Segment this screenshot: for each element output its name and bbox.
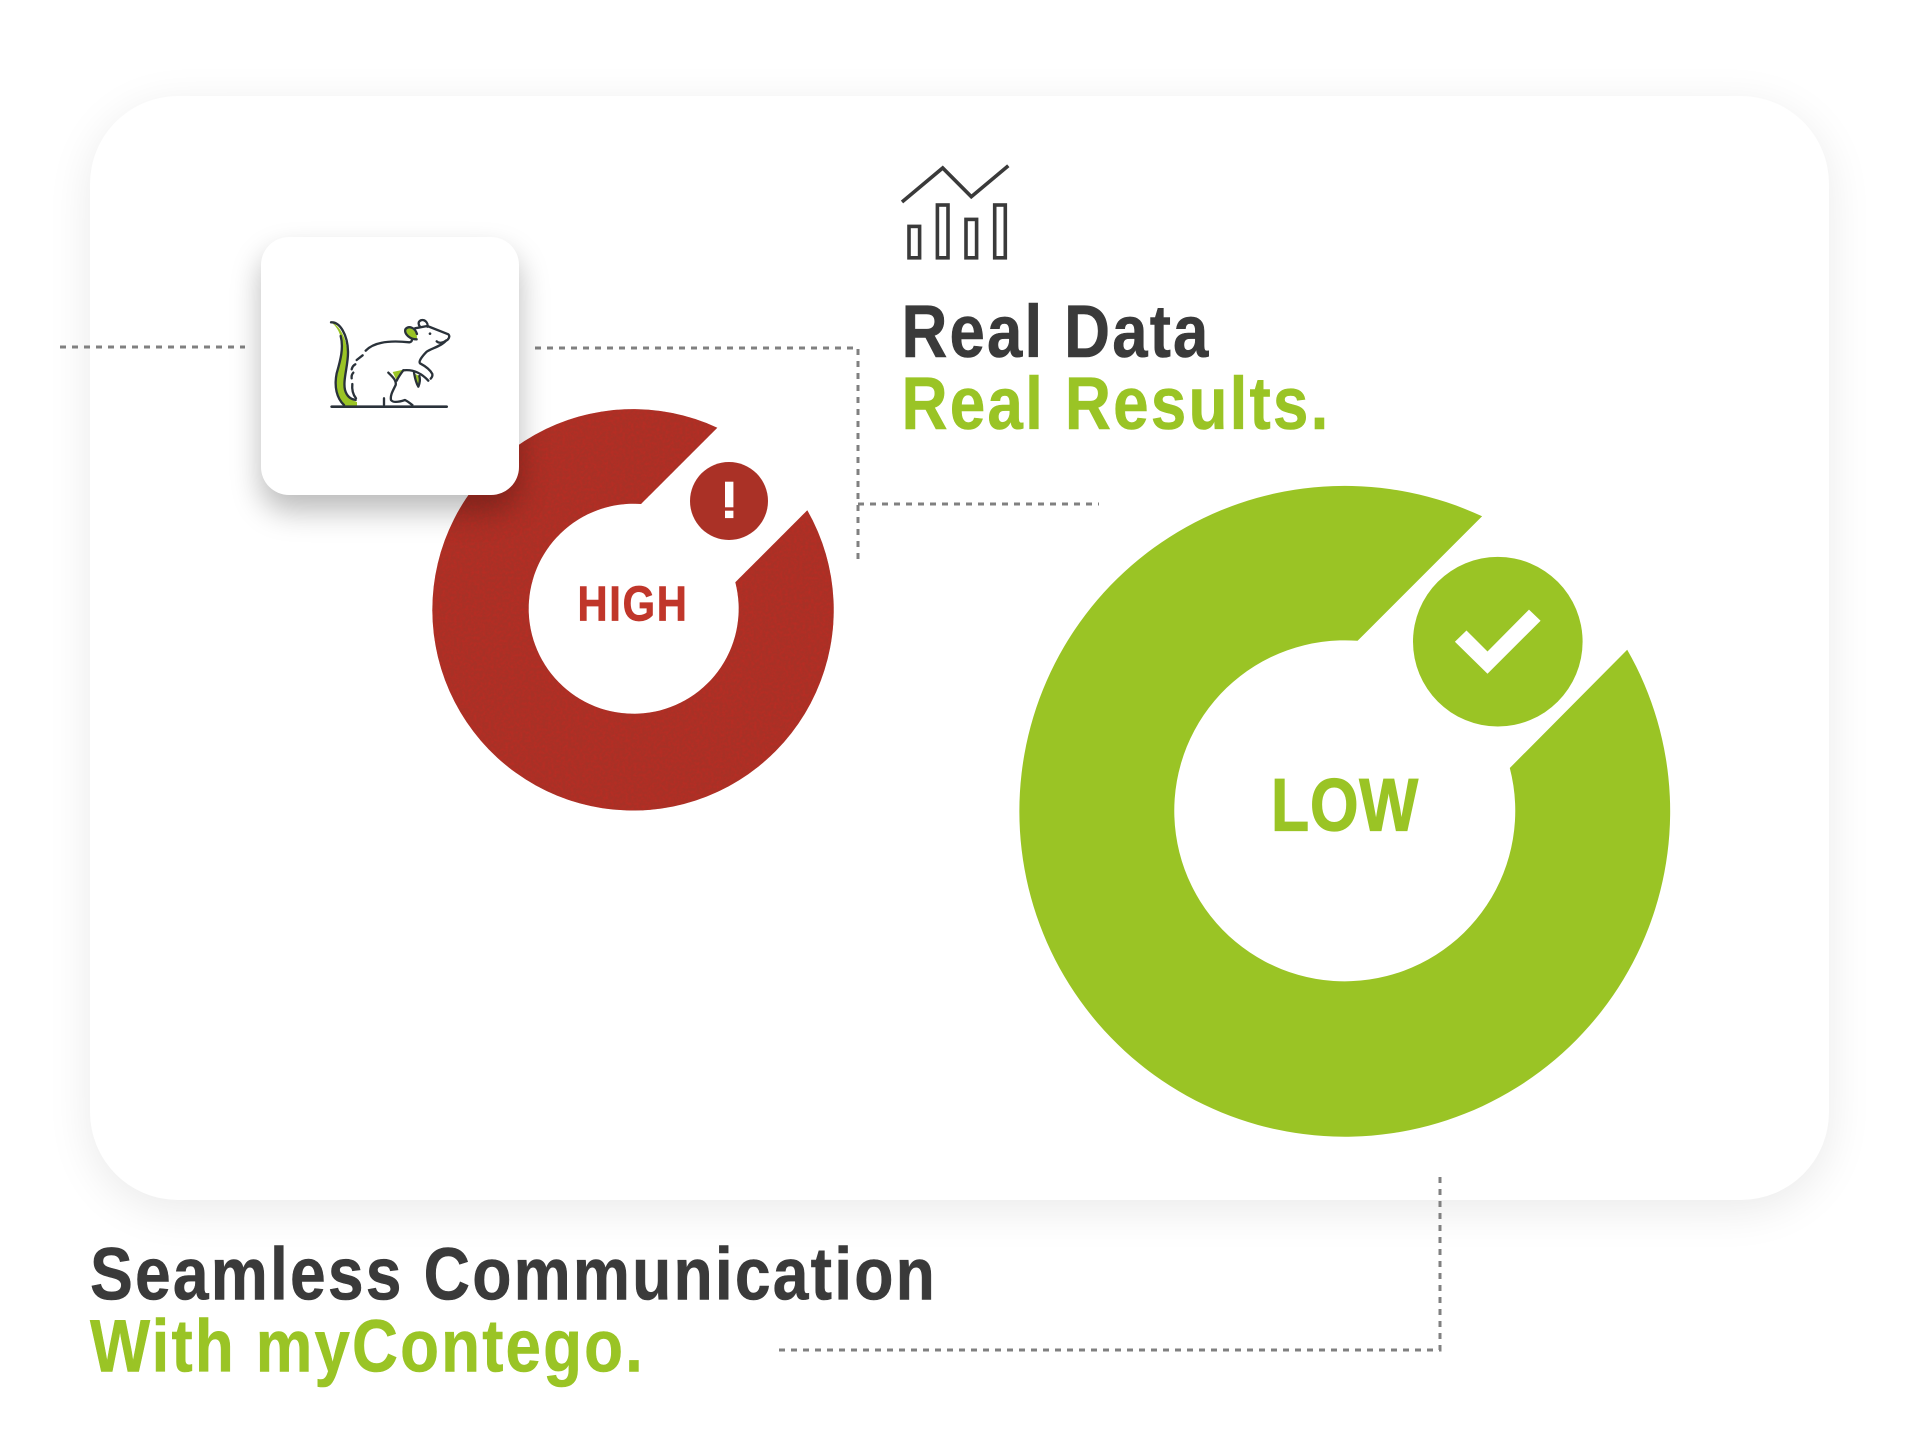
icon: alert badge [690, 462, 768, 540]
green ring with gap [1019, 486, 1670, 1137]
connector: dotted line left of rat card [60, 346, 245, 348]
heading: Seamless Communication With myContego [90, 1232, 937, 1388]
icon: check badge [1413, 557, 1583, 726]
card: rat icon tile [261, 237, 519, 495]
red ring with gap [432, 409, 834, 811]
connector: dotted line from rat card to heading and low donut [535, 348, 1099, 561]
chart: LOW risk donut [1019, 486, 1670, 1137]
chart: HIGH risk donut [432, 409, 834, 811]
heading: Real Data Real Results: Real Data [902, 290, 1210, 373]
heading: Seamless Communication With myContego: Seamless Communication [90, 1232, 937, 1316]
heading: Seamless Communication With myContego: With myContego. [90, 1304, 645, 1388]
panel: main white rounded card [90, 96, 1829, 1200]
label: HIGH: HIGH [578, 577, 688, 632]
label: LOW: LOW [1271, 764, 1419, 846]
heading: Real Data Real Results [902, 290, 1330, 445]
icon: bar and line chart [902, 166, 1008, 258]
connector: dotted line from low donut to bottom heading [778, 1177, 1440, 1350]
heading: Real Data Real Results: Real Results. [902, 362, 1330, 445]
